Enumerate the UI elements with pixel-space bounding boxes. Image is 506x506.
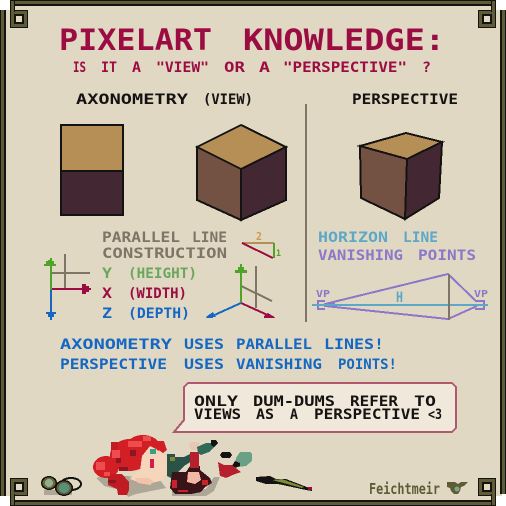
speech bubble: <3	[428, 407, 442, 423]
sleeping girl character	[93, 435, 220, 497]
heading: perspective: PERSPECTIVE	[352, 92, 458, 108]
horizon and vanishing points legend: POINTS	[418, 248, 476, 264]
parallel line construction label: CONSTRUCTION	[102, 246, 227, 262]
subtitle: IS	[73, 60, 86, 76]
takeaway text	[60, 337, 397, 373]
subtitle: "VIEW"	[156, 60, 209, 76]
subtitle: A	[132, 60, 142, 76]
vanishing point diagram: VP	[316, 289, 330, 300]
subtitle: IT	[101, 60, 117, 76]
divider	[305, 104, 307, 322]
isometric axes diagram	[206, 264, 275, 318]
speech bubble: DUM-DUMS	[253, 394, 335, 410]
title	[59, 23, 445, 57]
heading: axonometry: (VIEW)	[203, 92, 253, 108]
heading: axonometry	[76, 92, 253, 108]
axis legend: (DEPTH)	[128, 306, 190, 322]
flat axes diagram	[44, 254, 91, 320]
goggles	[41, 476, 81, 496]
vanishing point diagram: VP	[474, 289, 488, 300]
parallel line construction label: LINE	[192, 230, 227, 246]
subtitle: "PERSPECTIVE"	[283, 60, 407, 76]
ratio triangle: 2	[256, 230, 262, 243]
speech bubble: VIEWS	[194, 407, 241, 423]
takeaway text: USES	[184, 337, 224, 353]
axis legend: (WIDTH)	[128, 286, 187, 302]
takeaway text: VANISHING	[236, 357, 322, 373]
axis legend: Y	[102, 266, 113, 282]
title: KNOWLEDGE:	[243, 23, 445, 57]
subtitle	[73, 60, 431, 76]
takeaway text: PERSPECTIVE	[60, 357, 167, 373]
speech bubble: TO	[414, 394, 436, 410]
vanishing point diagram: H	[396, 290, 403, 306]
speech bubble: ONLY	[194, 394, 239, 410]
signature: Feichtmeir	[369, 480, 440, 498]
speech bubble: AS	[256, 407, 274, 423]
speech bubble	[174, 383, 456, 432]
flat axonometric block	[60, 124, 124, 216]
takeaway text: USES	[184, 357, 224, 373]
speech bubble: PERSPECTIVE	[314, 407, 420, 423]
horizon and vanishing points legend: HORIZON	[318, 230, 388, 246]
takeaway text: LINES!	[324, 337, 384, 353]
parallel line construction label: PARALLEL	[102, 230, 180, 246]
signature emblem	[447, 482, 468, 494]
takeaway text: AXONOMETRY	[60, 337, 173, 353]
horizon and vanishing points legend: LINE	[403, 230, 438, 246]
vanishing point diagram	[312, 274, 488, 320]
subtitle: A	[259, 60, 271, 76]
dropped hat and bottle	[218, 452, 252, 478]
axis legend: (HEIGHT)	[128, 266, 197, 282]
takeaway text: PARALLEL	[236, 337, 312, 353]
axis legend: Z	[102, 306, 112, 322]
title: PIXELART	[59, 23, 212, 57]
perspective cube	[360, 133, 442, 219]
heading: axonometry: AXONOMETRY	[76, 92, 189, 108]
paint brush	[256, 476, 312, 491]
parallel line construction label	[102, 230, 227, 262]
subtitle: OR	[224, 60, 246, 76]
speech bubble: A	[290, 407, 299, 423]
horizon and vanishing points legend	[318, 230, 476, 264]
horizon and vanishing points legend: VANISHING	[318, 248, 403, 264]
isometric cube	[197, 125, 286, 220]
subtitle: ?	[422, 60, 431, 76]
axis legend	[102, 266, 197, 322]
ratio triangle	[242, 230, 281, 259]
ratio triangle: 1	[276, 249, 281, 259]
takeaway text: POINTS!	[338, 357, 397, 373]
speech bubble: REFER	[350, 394, 399, 410]
axis legend: X	[102, 286, 113, 302]
